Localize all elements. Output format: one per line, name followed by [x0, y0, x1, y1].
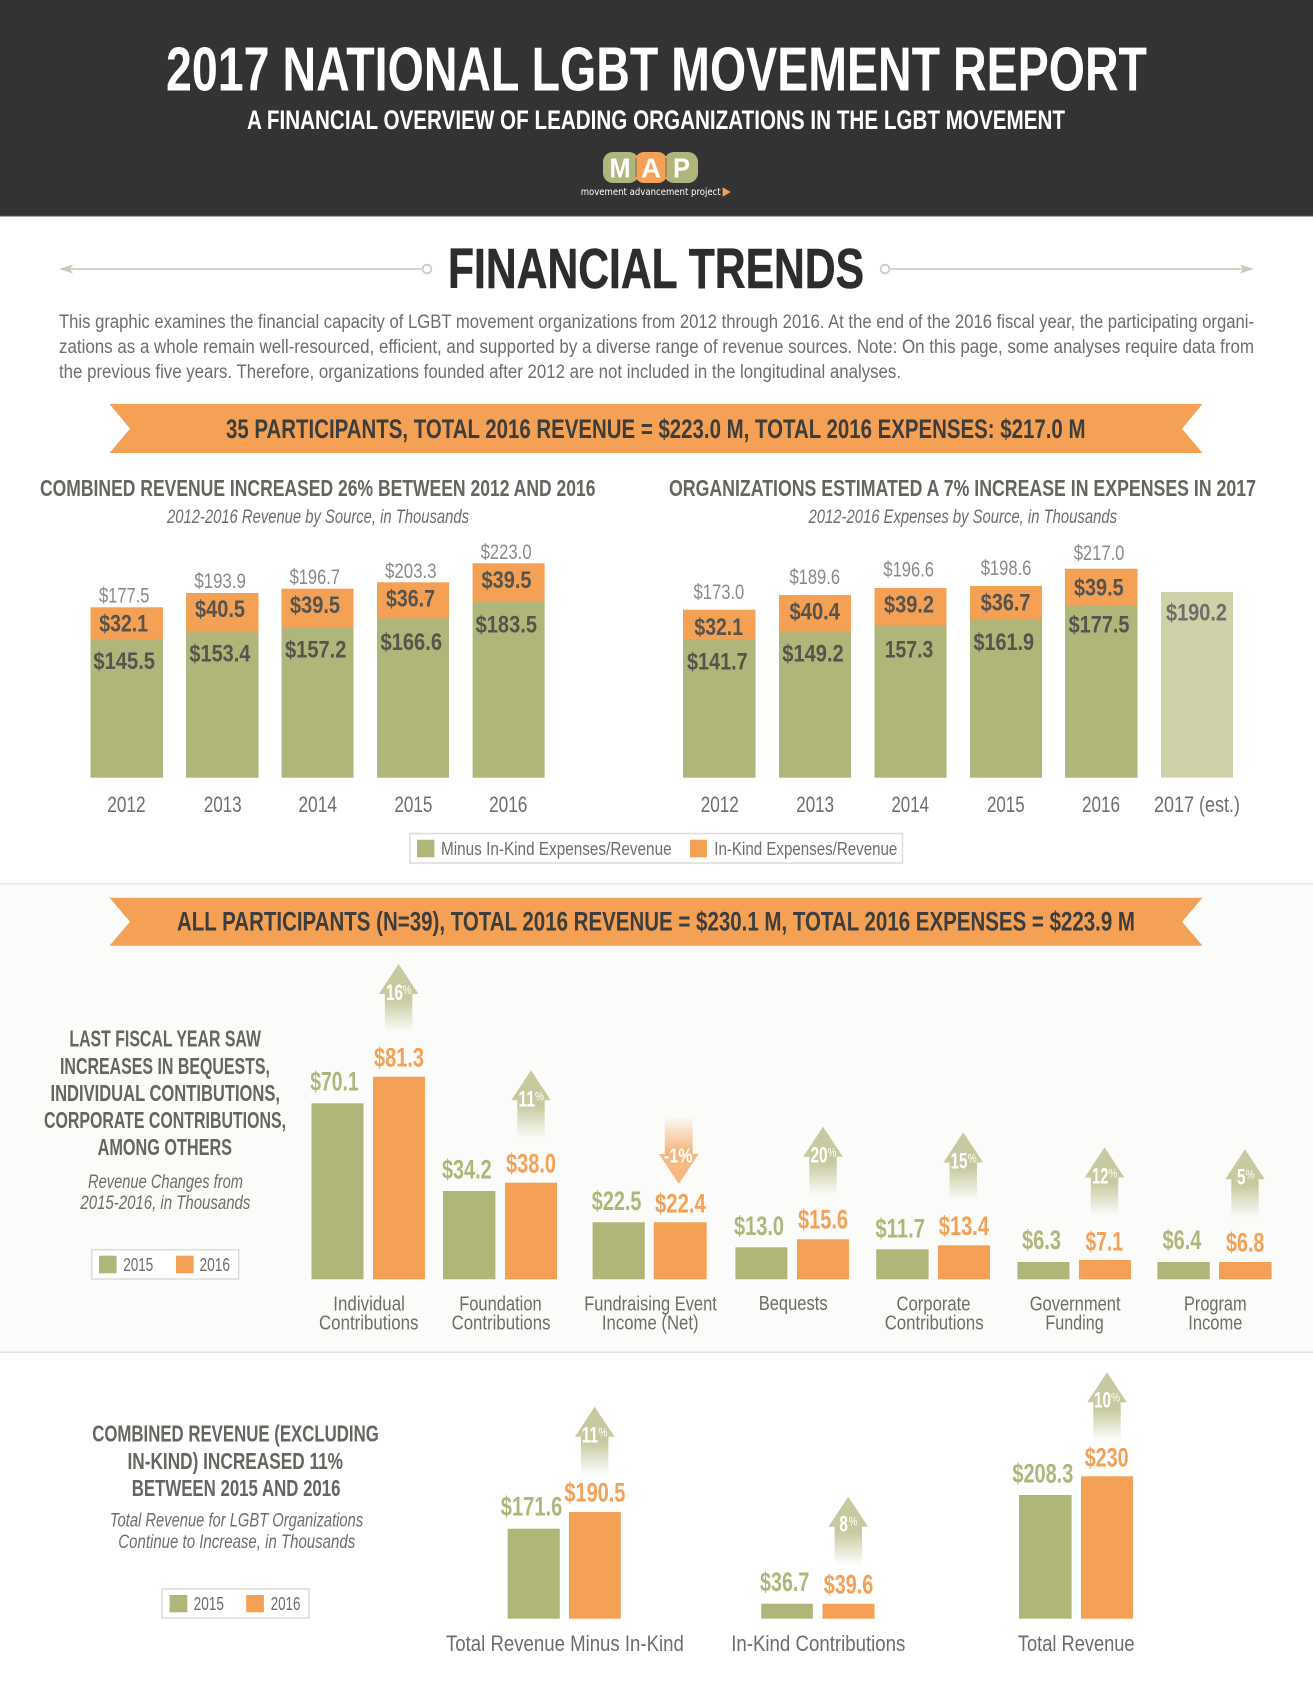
bar group: fundraising event income: $22.5	[592, 1186, 641, 1216]
bar group: program income: 5	[1237, 1165, 1246, 1190]
logo: MAP	[581, 152, 731, 198]
stacked bar chart: revenue 2012-2016: $153.4	[189, 641, 251, 668]
bar group: foundation contributions: Contributions	[452, 1311, 550, 1334]
text block: last fiscal year: INCREASES IN BEQUESTS,	[60, 1053, 270, 1079]
bar group: total revenue minus in-kind: $171.6	[501, 1492, 562, 1522]
stacked bar chart: expenses 2012-2017: $177.5	[1069, 611, 1130, 638]
text block: last fiscal year: INDIVIDUAL CONTIBUTIONS,	[50, 1080, 280, 1106]
section heading: financial trends: FINANCIAL TRENDS	[448, 237, 864, 301]
logo: MAP: A	[641, 152, 661, 184]
bar group: program income: %	[1246, 1168, 1255, 1182]
bar group: government funding: 12	[1092, 1163, 1108, 1188]
bar group: in-kind contributions: 8	[839, 1512, 848, 1537]
intro paragraph: the previous five years. Therefore, organizations founded after 2012 are not included in the longitudinal analyses.	[59, 362, 901, 383]
bar group: corporate contributions: %	[968, 1151, 977, 1165]
heading: revenue chart: 2012-2016 Revenue by Source, in Thousands	[166, 507, 469, 528]
bar group: program income: $6.4	[1162, 1225, 1202, 1255]
stacked bar chart: expenses 2012-2017: $40.4	[790, 598, 840, 625]
bar group: government funding: $6.3	[1022, 1225, 1061, 1255]
stacked bar chart: expenses 2012-2017: 157.3	[885, 637, 933, 664]
text block: combined revenue: Continue to Increase, in Thousands	[118, 1532, 356, 1553]
bar group: in-kind contributions	[731, 1497, 905, 1656]
heading: revenue chart	[40, 475, 596, 528]
bar group: in-kind contributions: $39.6	[824, 1569, 873, 1599]
bar group: total revenue: Total Revenue	[1018, 1631, 1135, 1656]
stacked bar chart: expenses 2012-2017: 2014	[891, 792, 929, 817]
bar group: total revenue minus in-kind	[446, 1407, 684, 1656]
bar group: individual contributions: Individual	[333, 1293, 405, 1316]
bar group: total revenue minus in-kind: %	[598, 1426, 608, 1440]
bar group: foundation contributions: %	[535, 1090, 544, 1104]
bar group: fundraising event income	[584, 1117, 717, 1334]
bar group: corporate contributions: 15	[950, 1148, 968, 1173]
bar group: in-kind contributions: $36.7	[760, 1567, 809, 1597]
heading: expenses chart	[669, 475, 1256, 528]
stacked bar chart: revenue 2012-2016: $166.6	[380, 629, 442, 656]
stacked bar chart: expenses 2012-2017: $198.6	[981, 557, 1031, 580]
stacked bar chart: revenue 2012-2016	[90, 541, 545, 817]
bar group: fundraising event income: $22.4	[655, 1189, 706, 1219]
bar group: individual contributions: $70.1	[310, 1067, 359, 1097]
bar group: individual contributions	[310, 964, 425, 1334]
stacked bar chart: expenses 2012-2017	[683, 542, 1240, 817]
bar group: individual contributions: %	[402, 983, 412, 997]
bar group: bequests: Bequests	[759, 1292, 828, 1315]
stacked bar chart: expenses 2012-2017: $161.9	[974, 629, 1034, 656]
stacked bar chart: expenses 2012-2017: $217.0	[1074, 542, 1124, 565]
panel: all participants	[0, 883, 1313, 1353]
stacked bar chart: revenue 2012-2016: $223.0	[481, 541, 532, 564]
bar group: total revenue: $208.3	[1012, 1459, 1073, 1489]
stacked bar chart: expenses 2012-2017: $196.6	[883, 559, 934, 582]
text block: last fiscal year: CORPORATE CONTRIBUTIONS,	[44, 1107, 286, 1133]
bar group: program income	[1157, 1149, 1272, 1334]
stacked bar chart: expenses 2012-2017: 2015	[987, 792, 1025, 817]
heading: revenue chart: COMBINED REVENUE INCREASED 26% BETWEEN 2012 AND 2016	[40, 475, 596, 501]
subtitle: A FINANCIAL OVERVIEW OF LEADING ORGANIZATIONS IN THE LGBT MOVEMENT	[247, 105, 1065, 135]
bar group: bequests: $13.0	[734, 1211, 784, 1241]
bar group: government funding: %	[1108, 1166, 1118, 1180]
stacked bar chart: revenue 2012-2016: $39.5	[482, 567, 532, 594]
legend: expenses and revenue: Minus In-Kind Expenses/Revenue	[441, 838, 672, 859]
bar group: corporate contributions: Corporate	[896, 1293, 970, 1316]
header band	[0, 0, 1313, 216]
stacked bar chart: expenses 2012-2017: $173.0	[694, 581, 744, 604]
stacked bar chart: expenses 2012-2017: $32.1	[694, 614, 743, 641]
text block: last fiscal year: AMONG OTHERS	[98, 1134, 232, 1160]
banner: 35 participants: 35 PARTICIPANTS, TOTAL 2016 REVENUE = $223.0 M, TOTAL 2016 EXPENSES: $217.0 M	[226, 414, 1086, 444]
bar group: foundation contributions: 11	[518, 1087, 535, 1112]
heading: expenses chart: 2012-2016 Expenses by Source, in Thousands	[808, 507, 1117, 528]
bar group: total revenue	[1012, 1372, 1135, 1656]
bar group: corporate contributions: Contributions	[885, 1311, 984, 1334]
stacked bar chart: revenue 2012-2016: $145.5	[93, 648, 155, 675]
bar group: total revenue minus in-kind: $190.5	[564, 1478, 625, 1508]
stacked bar chart: revenue 2012-2016: 2012	[107, 792, 146, 817]
bar group: bequests: %	[828, 1145, 837, 1159]
bar group: program income: $6.8	[1226, 1228, 1264, 1258]
bar group: corporate contributions: $13.4	[939, 1211, 989, 1241]
bar group: fundraising event income: Fundraising Event	[584, 1293, 717, 1316]
logo: MAP: P	[673, 152, 690, 184]
bar group: bequests: $15.6	[798, 1204, 848, 1234]
text block: last fiscal year	[44, 1026, 286, 1214]
legend: 2015 and 2016: 2015	[194, 1593, 224, 1614]
bar group: total revenue minus in-kind: Total Revenue Minus In-Kind	[446, 1631, 684, 1656]
legend: expenses and revenue	[410, 834, 902, 863]
stacked bar chart: expenses 2012-2017: $39.5	[1074, 574, 1124, 601]
bar group: program income: Income	[1188, 1311, 1242, 1334]
stacked bar chart: revenue 2012-2016: $157.2	[285, 637, 346, 664]
stacked bar chart: revenue 2012-2016: $36.7	[386, 586, 435, 613]
intro paragraph	[59, 312, 1254, 383]
bar group: foundation contributions: $34.2	[442, 1154, 492, 1184]
bar group: in-kind contributions: %	[849, 1515, 857, 1529]
stacked bar chart: expenses 2012-2017: 2016	[1082, 792, 1120, 817]
text block: combined revenue: COMBINED REVENUE (EXCLUDING	[92, 1421, 379, 1447]
stacked bar chart: expenses 2012-2017: $189.6	[790, 566, 840, 589]
text block: combined revenue: BETWEEN 2015 AND 2016	[132, 1475, 340, 1501]
stacked bar chart: expenses 2012-2017: $39.2	[884, 592, 934, 619]
text block: last fiscal year: 2015-2016, in Thousands	[80, 1193, 251, 1214]
stacked bar chart: revenue 2012-2016: $32.1	[99, 611, 148, 638]
bar group: bequests	[734, 1127, 849, 1315]
stacked bar chart: expenses 2012-2017: $190.2	[1166, 600, 1227, 627]
text block: combined revenue	[92, 1421, 379, 1553]
bar group: government funding	[1017, 1147, 1131, 1334]
section heading: financial trends	[59, 237, 1254, 301]
bar group: government funding: $7.1	[1086, 1226, 1123, 1256]
logo: MAP: movement advancement project	[581, 187, 721, 198]
banner: all participants	[110, 898, 1202, 946]
bar group: total revenue: $230	[1085, 1442, 1129, 1472]
bar group: bequests: 20	[810, 1142, 828, 1167]
text block: last fiscal year: LAST FISCAL YEAR SAW	[69, 1026, 262, 1052]
bar group: foundation contributions	[442, 1070, 557, 1334]
bar group: total revenue: %	[1111, 1391, 1120, 1405]
stacked bar chart: expenses 2012-2017: $149.2	[782, 641, 844, 668]
stacked bar chart: revenue 2012-2016: 2016	[489, 792, 527, 817]
banner: 35 participants	[110, 404, 1202, 453]
legend: 2015 and 2016: 2016	[200, 1254, 230, 1275]
text block: combined revenue: Total Revenue for LGBT Organizations	[110, 1511, 364, 1532]
bar group: individual contributions: 16	[386, 980, 403, 1005]
legend: 2015 and 2016: 2016	[271, 1593, 300, 1614]
stacked bar chart: revenue 2012-2016: 2015	[394, 792, 432, 817]
bar group: foundation contributions: $38.0	[506, 1149, 556, 1179]
bar group: corporate contributions: $11.7	[875, 1213, 925, 1243]
stacked bar chart: revenue 2012-2016: $203.3	[385, 560, 436, 583]
bar group: foundation contributions: Foundation	[459, 1293, 542, 1316]
text block: last fiscal year: Revenue Changes from	[88, 1172, 243, 1193]
stacked bar chart: revenue 2012-2016: $39.5	[290, 592, 340, 619]
stacked bar chart: revenue 2012-2016: 2014	[298, 792, 337, 817]
bar group: total revenue: 10	[1094, 1388, 1111, 1413]
stacked bar chart: revenue 2012-2016: $177.5	[99, 585, 149, 608]
bar group: individual contributions: $81.3	[374, 1043, 424, 1073]
bar group: government funding: Funding	[1045, 1311, 1104, 1334]
stacked bar chart: expenses 2012-2017: $141.7	[687, 648, 748, 675]
bar group: program income: Program	[1184, 1293, 1247, 1316]
stacked bar chart: revenue 2012-2016: $196.7	[290, 566, 340, 589]
stacked bar chart: expenses 2012-2017: 2013	[796, 792, 834, 817]
bar group: fundraising event income: Income (Net)	[602, 1311, 699, 1334]
bar group: corporate contributions	[875, 1132, 990, 1334]
logo: MAP: M	[610, 152, 630, 184]
stacked bar chart: revenue 2012-2016: 2013	[204, 792, 242, 817]
stacked bar chart: expenses 2012-2017: 2012	[701, 792, 739, 817]
stacked bar chart: revenue 2012-2016: $193.9	[194, 570, 246, 593]
bar group: in-kind contributions: In-Kind Contributions	[731, 1631, 905, 1656]
bar group: individual contributions: Contributions	[319, 1311, 418, 1334]
legend: expenses and revenue: In-Kind Expenses/Revenue	[714, 838, 897, 859]
stacked bar chart: revenue 2012-2016: $40.5	[195, 596, 245, 623]
bar group: government funding: Government	[1030, 1293, 1121, 1316]
stacked bar chart: revenue 2012-2016: $183.5	[476, 611, 537, 638]
stacked bar chart: expenses 2012-2017: $36.7	[981, 590, 1030, 617]
legend: 2015 and 2016: 2015	[123, 1254, 153, 1275]
bar group: fundraising event income: -1%	[664, 1146, 693, 1168]
legend: 2015 and 2016	[162, 1589, 309, 1618]
text block: combined revenue: IN-KIND) INCREASED 11%	[128, 1448, 343, 1474]
legend: 2015 and 2016	[92, 1250, 239, 1279]
bar group: total revenue minus in-kind: 11	[582, 1423, 598, 1448]
stacked bar chart: expenses 2012-2017: 2017 (est.)	[1154, 792, 1240, 817]
